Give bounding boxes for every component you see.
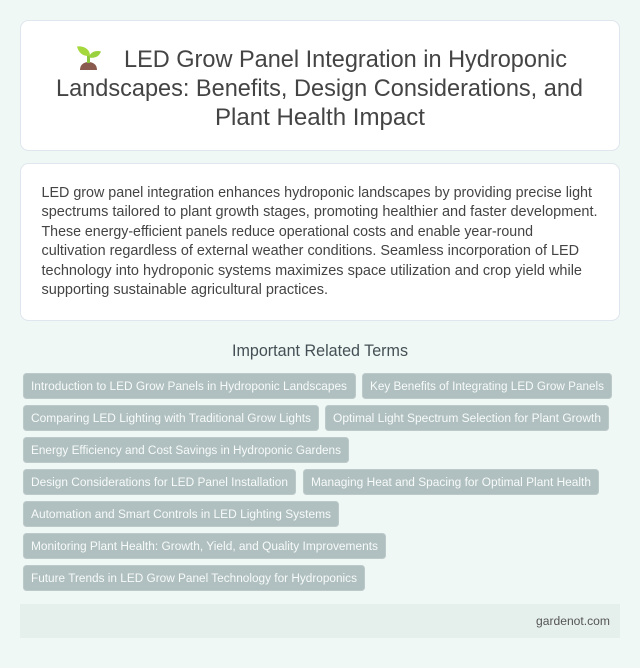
description text: technology into hydroponic systems maximizes space utilization and crop yield while — [42, 263, 582, 279]
description text: LED grow panel integration enhances hydroponic landscapes by providing precise light — [42, 185, 592, 201]
description text — [42, 185, 598, 298]
icon: seedling — [77, 46, 101, 70]
title: LED Grow Panel Integration in Hydroponic — [124, 46, 567, 73]
tag: monitoring: Monitoring Plant Health: Growth, Yield, and Quality Improvements — [31, 539, 378, 553]
tag: design considerations: Design Considerations for LED Panel Installation — [31, 475, 288, 489]
description text: spectrums tailored to plant growth stages, promoting healthier and faster development. — [42, 204, 598, 220]
tag: energy efficiency: Energy Efficiency and Cost Savings in Hydroponic Gardens — [31, 443, 341, 457]
tag: comparing lighting: Comparing LED Lighting with Traditional Grow Lights — [31, 411, 311, 425]
related terms tags — [24, 374, 612, 590]
description text: supporting sustainable agricultural practices. — [42, 282, 328, 298]
tag: key benefits — [362, 374, 612, 398]
tag: monitoring — [24, 534, 386, 558]
footer — [20, 604, 620, 638]
tag: future trends — [24, 566, 364, 590]
tag: light spectrum: Optimal Light Spectrum Selection for Plant Growth — [333, 411, 601, 425]
panel: description — [20, 164, 620, 320]
description text: cultivation regardless of external weather conditions. Seamless incorporation of LED — [42, 243, 579, 259]
tag: design considerations — [24, 470, 296, 494]
panel: title header — [20, 20, 620, 150]
description text: These energy-efficient panels reduce operational costs and enable year-round — [42, 224, 533, 240]
tag: introduction — [24, 374, 356, 398]
tag: automation — [24, 502, 338, 526]
tag: future trends: Future Trends in LED Grow Panel Technology for Hydroponics — [31, 571, 357, 585]
tag: automation: Automation and Smart Controls in LED Lighting Systems — [31, 507, 331, 521]
title: Landscapes: Benefits, Design Considerations, and — [56, 75, 583, 102]
heading: important related terms: Important Related Terms — [232, 342, 408, 360]
tag: light spectrum — [326, 406, 608, 430]
title: Plant Health Impact — [215, 104, 425, 131]
tag: comparing lighting — [24, 406, 318, 430]
footer source text: gardenot.com — [536, 614, 610, 628]
tag: key benefits: Key Benefits of Integrating LED Grow Panels — [370, 379, 604, 393]
tag: heat and spacing — [304, 470, 598, 494]
tag: energy efficiency — [24, 438, 348, 462]
title — [56, 46, 583, 131]
tag: heat and spacing: Managing Heat and Spacing for Optimal Plant Health — [311, 475, 591, 489]
tag: introduction: Introduction to LED Grow Panels in Hydroponic Landscapes — [31, 379, 347, 393]
